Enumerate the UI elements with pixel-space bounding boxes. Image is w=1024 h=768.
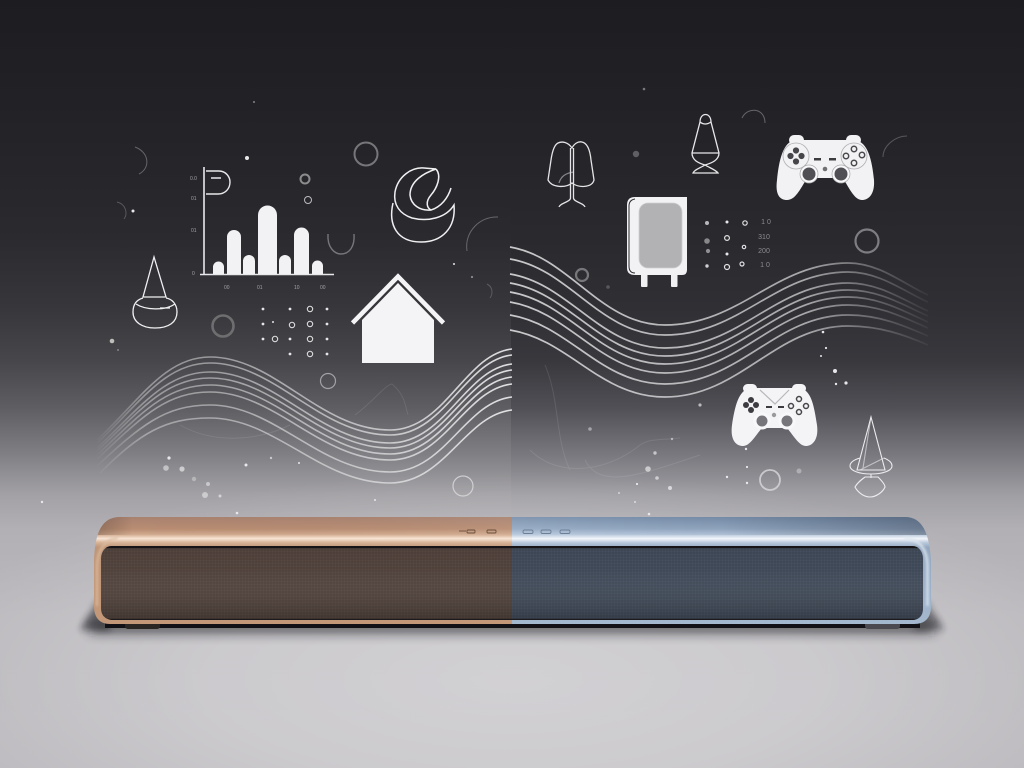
speaker cabinet xyxy=(627,197,687,275)
decorative rings and arcs left xyxy=(117,142,498,496)
bar chart xyxy=(190,167,334,291)
controller buttons xyxy=(788,396,808,414)
controller thumb sticks xyxy=(755,414,794,428)
matrix number labels xyxy=(758,219,771,269)
dot matrix left xyxy=(262,306,328,357)
grille top edge xyxy=(100,546,924,548)
icon: mirrored outline shape xyxy=(548,142,594,207)
chart bars xyxy=(213,206,323,274)
speaker grille xyxy=(100,546,924,621)
controller body xyxy=(732,388,817,446)
controller buttons xyxy=(841,143,867,169)
bronze half xyxy=(90,517,512,625)
controller center V xyxy=(760,390,789,404)
controller shoulders xyxy=(789,135,804,145)
steel blue half xyxy=(512,517,934,625)
icon: cone on stand right xyxy=(850,417,892,497)
icon: house xyxy=(352,276,444,363)
right sound waves xyxy=(510,247,928,397)
speaker legs xyxy=(641,272,648,287)
chart axis labels: 00 xyxy=(224,285,230,291)
house body xyxy=(362,283,434,363)
controller body xyxy=(777,140,874,200)
controller dpad xyxy=(783,143,809,169)
controller thumb sticks xyxy=(800,165,850,183)
matrix number labels: 1 0 xyxy=(761,219,771,226)
controller dpad xyxy=(743,397,759,413)
soundbar feet xyxy=(125,622,160,629)
icon: lamp xyxy=(692,114,719,173)
chart axis labels: 01 xyxy=(191,196,197,202)
left sound waves xyxy=(97,349,512,483)
floor glow xyxy=(0,470,1024,768)
icon: crescent swirl xyxy=(392,168,454,242)
scattered dots left xyxy=(41,101,473,514)
chart axis labels: 0 xyxy=(192,271,195,277)
icon: cone on bowl left xyxy=(133,257,177,328)
background left half xyxy=(0,0,512,768)
right edge highlight xyxy=(904,538,928,606)
chart axis labels: 0.0 xyxy=(190,176,197,182)
icon: game controller top xyxy=(777,135,874,200)
faint wisps xyxy=(180,365,700,477)
icon: game controller lower xyxy=(732,384,817,446)
matrix number labels: 1 0 xyxy=(760,262,770,269)
chart axis labels: 01 xyxy=(191,228,197,234)
controller center xyxy=(766,406,784,408)
icon: speaker cabinet xyxy=(627,197,687,287)
matrix number labels: 310 xyxy=(758,234,770,241)
chart flag mark xyxy=(206,171,230,194)
dot matrix right xyxy=(704,219,771,270)
scattered dots right xyxy=(588,331,848,515)
blue grille xyxy=(512,546,924,621)
soundbar control buttons xyxy=(459,530,570,534)
soundbar body xyxy=(90,517,934,625)
soundbar xyxy=(90,517,934,629)
decorative rings and arcs right xyxy=(576,88,907,490)
grille bottom edge xyxy=(100,619,924,620)
body end shading xyxy=(90,517,934,535)
chart axes xyxy=(200,167,334,274)
matrix number labels: 200 xyxy=(758,248,770,255)
background right half xyxy=(511,0,1024,768)
soundbar shadow xyxy=(80,600,944,632)
controller center xyxy=(814,158,836,160)
chart axis labels: 10 xyxy=(294,285,300,291)
left edge highlight xyxy=(97,538,118,606)
speaker driver panel xyxy=(639,203,682,268)
bronze grille xyxy=(100,546,512,621)
chart axis labels: 00 xyxy=(320,285,326,291)
house roof xyxy=(352,276,444,323)
chart axis labels xyxy=(190,176,326,291)
chart axis labels: 01 xyxy=(257,285,263,291)
controller shoulders xyxy=(743,384,757,393)
